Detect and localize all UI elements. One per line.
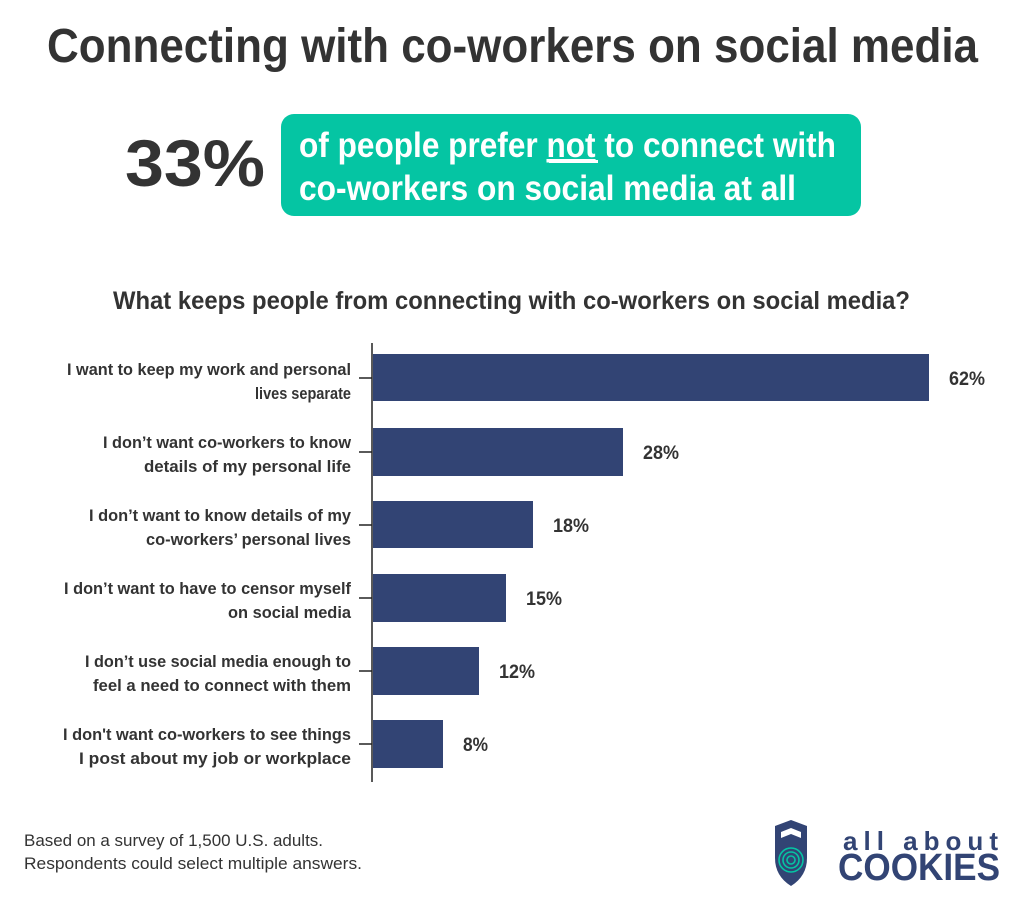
- bar chart: 15%: [526, 589, 562, 610]
- bar chart: 18%: [553, 516, 589, 537]
- callout: teal box: co-workers on social media at all: [299, 169, 796, 208]
- big stat: 33%: 33%: [125, 126, 265, 200]
- bar chart: I don't want co-workers to see things: [63, 725, 351, 744]
- bar chart: 12%: [499, 662, 535, 683]
- bar chart: lives separate: [255, 384, 351, 403]
- bar chart: 8%: [463, 735, 488, 756]
- footnote: [24, 832, 362, 873]
- bar chart: feel a need to connect with them: [93, 676, 351, 695]
- bar chart: 62%: [949, 369, 985, 390]
- chart heading: What keeps people from connecting with co-workers on social media?: [113, 287, 910, 315]
- bar chart: co-workers’ personal lives: [146, 530, 351, 549]
- bar chart: I don’t use social media enough to: [85, 652, 351, 671]
- footnote: Based on a survey of 1,500 U.S. adults.: [24, 832, 323, 850]
- bar chart: I post about my job or workplace: [79, 749, 351, 768]
- bar chart: I don’t want to know details of my: [89, 506, 352, 525]
- logo: all about cookies: COOKIES: [838, 847, 1000, 889]
- logo: all about cookies: [775, 820, 1000, 889]
- bar chart: I don’t want co-workers to know: [103, 433, 352, 452]
- bar chart: [63, 343, 985, 782]
- bar chart: I don’t want to have to censor myself: [64, 579, 351, 598]
- bar chart: 28%: [643, 443, 679, 464]
- bar chart: on social media: [228, 603, 352, 622]
- callout: teal box: of people prefer not to connect with: [299, 126, 836, 165]
- callout: teal box: [281, 114, 861, 216]
- logo: all about cookies: all about: [843, 826, 998, 856]
- bar chart: I want to keep my work and personal: [67, 360, 351, 379]
- bar chart: details of my personal life: [144, 457, 351, 476]
- footnote: Respondents could select multiple answers.: [24, 855, 362, 873]
